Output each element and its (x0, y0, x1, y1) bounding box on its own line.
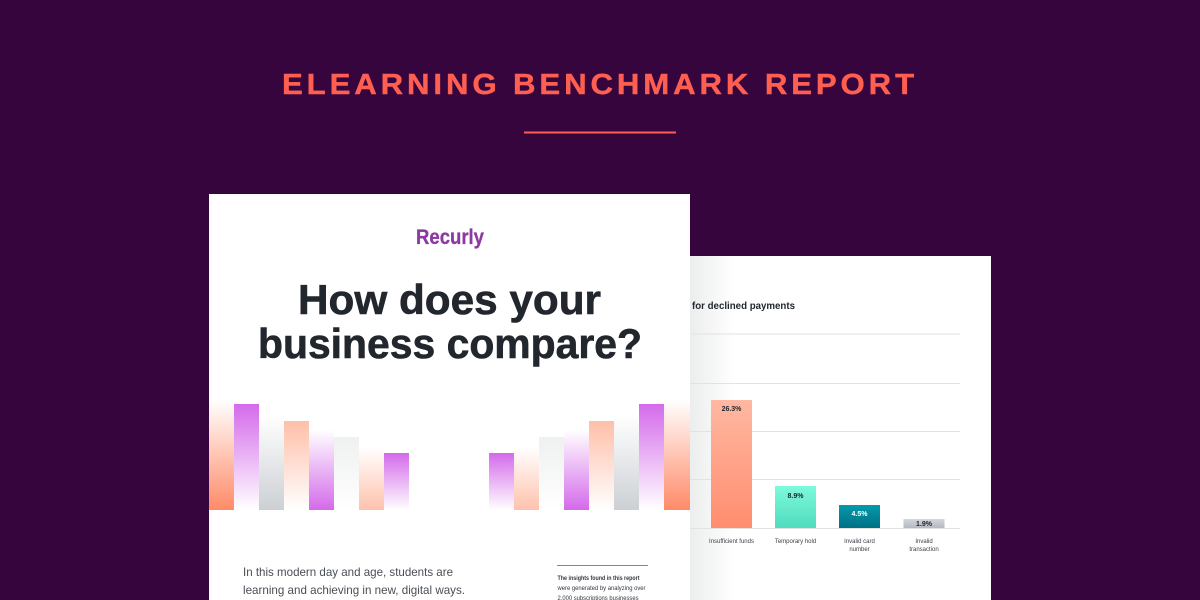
panel: front report cover (209, 194, 690, 600)
decorative bars: left (209, 400, 409, 510)
bar: temporary hold: Temporary hold (775, 539, 816, 545)
cover title: business compare? (258, 320, 642, 367)
bar: invalid card number (839, 505, 880, 553)
bar: insufficient funds: Insufficient funds (709, 539, 754, 545)
page shadow (690, 256, 735, 600)
logo: Recurly: Recurly (416, 226, 484, 249)
intro text (243, 565, 465, 597)
bar: invalid transaction (904, 519, 944, 553)
bar: temporary hold: 8.9% (788, 493, 804, 500)
panel: back report page (690, 256, 991, 600)
intro text: learning and achieving in new, digital ways. (243, 583, 465, 597)
bar: invalid card number: Invalid card (844, 539, 875, 545)
bar: invalid transaction: 1.9% (916, 521, 933, 528)
decorative bars: right (489, 400, 690, 510)
banner heading: ELEARNING BENCHMARK REPORT (282, 69, 918, 101)
sidebar note: The insights found in this report (558, 576, 640, 582)
bar chart: declined payments (690, 334, 960, 553)
cover title: How does your (298, 276, 601, 323)
bar: invalid transaction: transaction (909, 547, 939, 553)
bar: temporary hold (775, 486, 816, 545)
bar: invalid card number: number (849, 547, 870, 553)
sidebar note: were generated by analyzing over (557, 586, 646, 592)
chart heading: for declined payments (692, 300, 795, 312)
heading underline (524, 132, 676, 134)
bar: insufficient funds: 26.3% (722, 406, 742, 413)
cover title (258, 276, 642, 367)
bar: invalid card number: 4.5% (852, 511, 868, 518)
sidebar rule (557, 565, 648, 566)
intro text: In this modern day and age, students are (243, 565, 453, 579)
sidebar note (557, 576, 646, 600)
bar: insufficient funds (709, 400, 754, 545)
bar: invalid transaction: Invalid (915, 539, 933, 545)
